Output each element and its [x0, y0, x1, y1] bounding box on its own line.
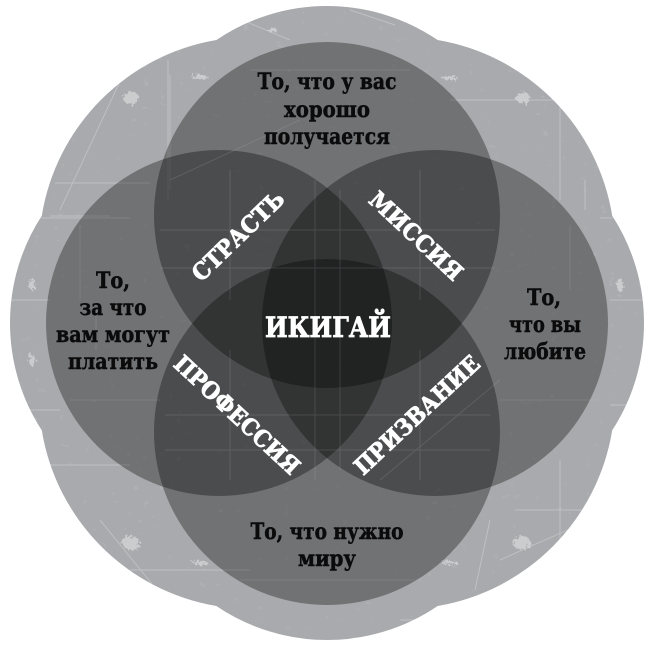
text: bottom circle	[250, 519, 404, 572]
text: right circle: любите	[504, 339, 586, 365]
text: left circle: То,	[96, 268, 130, 294]
text: left circle: платить	[68, 349, 158, 375]
label: vocation: ПРИЗВАНИЕ	[349, 350, 486, 480]
circle: what you love	[262, 150, 608, 496]
text: bottom circle: миру	[298, 546, 356, 572]
text: right circle: То,	[527, 285, 561, 311]
circle: what you can be paid for	[46, 150, 392, 496]
circle: what the world needs	[154, 259, 500, 605]
text: left circle	[56, 268, 170, 375]
label: mission: МИССИЯ	[363, 186, 468, 286]
center title: ИКИГАЙ	[265, 309, 391, 344]
text: top circle: То, что у вас	[258, 69, 396, 95]
text: left circle: вам могут	[56, 322, 170, 348]
inner scratches	[70, 70, 600, 580]
distressed blotches	[29, 28, 623, 565]
text: left circle: за что	[80, 295, 146, 321]
text: right circle: что вы	[509, 312, 581, 338]
label: passion: СТРАСТЬ	[187, 186, 290, 287]
circle: what you are good at	[154, 42, 500, 388]
label: profession: ПРОФЕССИЯ	[168, 350, 305, 480]
text: right circle	[504, 285, 586, 365]
text: top circle: получается	[264, 124, 390, 150]
venn circles	[46, 42, 608, 605]
text: bottom circle: То, что нужно	[250, 519, 404, 545]
text: top circle	[258, 69, 396, 150]
text: top circle: хорошо	[284, 97, 370, 123]
